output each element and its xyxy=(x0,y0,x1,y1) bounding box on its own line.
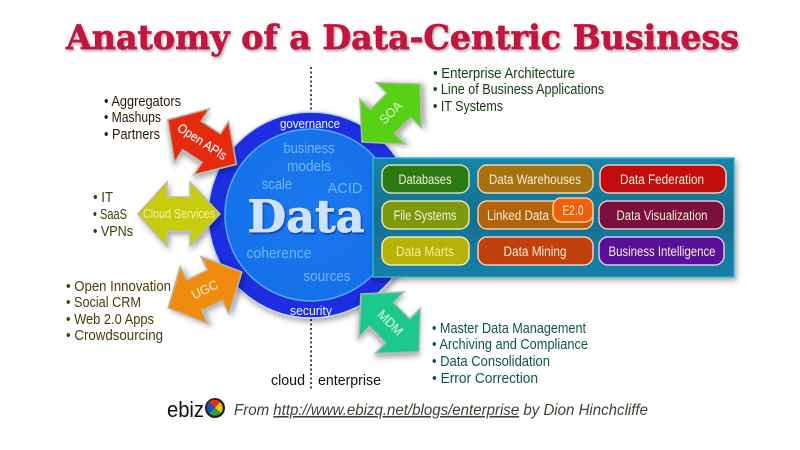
list: SOA items: • Line of Business Applications xyxy=(433,82,604,98)
pill: Databases xyxy=(382,165,469,193)
arrow: MDM: MDM xyxy=(374,307,406,339)
arrow: Cloud Services xyxy=(138,182,220,246)
concept words: business xyxy=(284,140,334,157)
dotted divider: cloud and enterprise xyxy=(310,67,312,389)
arrow: Cloud Services: Cloud Services xyxy=(143,207,215,221)
list: Cloud Services items xyxy=(93,190,133,240)
arrow: SOA xyxy=(339,61,443,165)
list: MDM items: • Archiving and Compliance xyxy=(432,337,588,353)
label: security: security xyxy=(290,303,332,318)
logo: ebizQ: ebiz xyxy=(167,397,204,422)
arrow: Open APIs: Open APIs xyxy=(175,121,229,163)
concept words: sources xyxy=(304,268,350,285)
data circle xyxy=(208,112,414,318)
logo: ebizQ xyxy=(167,397,225,422)
pill: Linked Data: Linked Data xyxy=(487,208,549,223)
pill: Data Visualization: Data Visualization xyxy=(616,208,708,223)
pill: Data Marts xyxy=(382,237,469,265)
pill: Data Visualization xyxy=(599,201,724,229)
label: governance: governance xyxy=(280,116,340,131)
list: UGC items: • Crowdsourcing xyxy=(66,328,163,344)
pill: Business Intelligence xyxy=(599,237,724,265)
badge: E2.0 xyxy=(553,198,593,222)
panel: data stores xyxy=(373,158,734,277)
list: MDM items xyxy=(432,321,588,387)
pill: Data Warehouses: Data Warehouses xyxy=(489,172,581,187)
label: cloud: cloud xyxy=(271,373,305,389)
list: UGC items: • Social CRM xyxy=(66,295,141,311)
list: MDM items: • Master Data Management xyxy=(432,321,586,337)
list: UGC items: • Open Innovation xyxy=(66,279,171,295)
pill: Databases: Databases xyxy=(398,172,452,187)
pill: File Systems: File Systems xyxy=(394,208,457,223)
arrow: Open APIs xyxy=(150,93,254,191)
list: Open APIs items: • Aggregators xyxy=(104,94,181,110)
arrow: UGC xyxy=(154,243,256,337)
concept words: ACID xyxy=(328,180,363,197)
pill: Data Mining xyxy=(478,237,593,265)
list: Open APIs items xyxy=(104,94,181,143)
list: SOA items: • IT Systems xyxy=(433,99,503,115)
arrow: MDM xyxy=(338,271,442,375)
pill: Data Warehouses xyxy=(478,165,593,193)
concept words: models xyxy=(287,158,331,175)
list: MDM items: • Error Correction xyxy=(432,371,538,387)
list: UGC items xyxy=(66,279,171,344)
list: SOA items: • Enterprise Architecture xyxy=(433,66,575,82)
concept words xyxy=(246,140,363,285)
concept words: coherence xyxy=(246,245,312,262)
label: enterprise: enterprise xyxy=(318,373,381,389)
pill: Data Federation: Data Federation xyxy=(620,172,704,187)
pill: Data Marts: Data Marts xyxy=(396,244,454,259)
list: Cloud Services items: • IT xyxy=(93,190,113,206)
pill: Data Federation xyxy=(600,165,726,193)
arrow: UGC: UGC xyxy=(189,278,221,302)
list: UGC items: • Web 2.0 Apps xyxy=(66,312,154,328)
source credit: From http://www.ebizq.net/blogs/enterprise by Dion Hinchcliffe xyxy=(234,402,648,419)
list: SOA items xyxy=(433,66,604,115)
pill: Data Mining: Data Mining xyxy=(504,244,566,259)
list: Cloud Services items: • VPNs xyxy=(93,224,133,240)
Data heading: Data xyxy=(248,190,364,243)
list: Cloud Services items: • SaaS xyxy=(93,207,127,223)
concept words: scale xyxy=(262,176,292,193)
arrow: SOA: SOA xyxy=(377,98,406,127)
pill: File Systems xyxy=(382,201,469,229)
pill: Linked Data xyxy=(478,201,593,229)
list: Open APIs items: • Mashups xyxy=(104,110,161,126)
title: Anatomy of a Data-Centric Business xyxy=(65,18,739,58)
list: Open APIs items: • Partners xyxy=(104,127,160,143)
pill: Business Intelligence: Business Intelligence xyxy=(608,244,716,259)
list: MDM items: • Data Consolidation xyxy=(432,354,550,370)
badge: E2.0: E2.0 xyxy=(562,203,584,218)
